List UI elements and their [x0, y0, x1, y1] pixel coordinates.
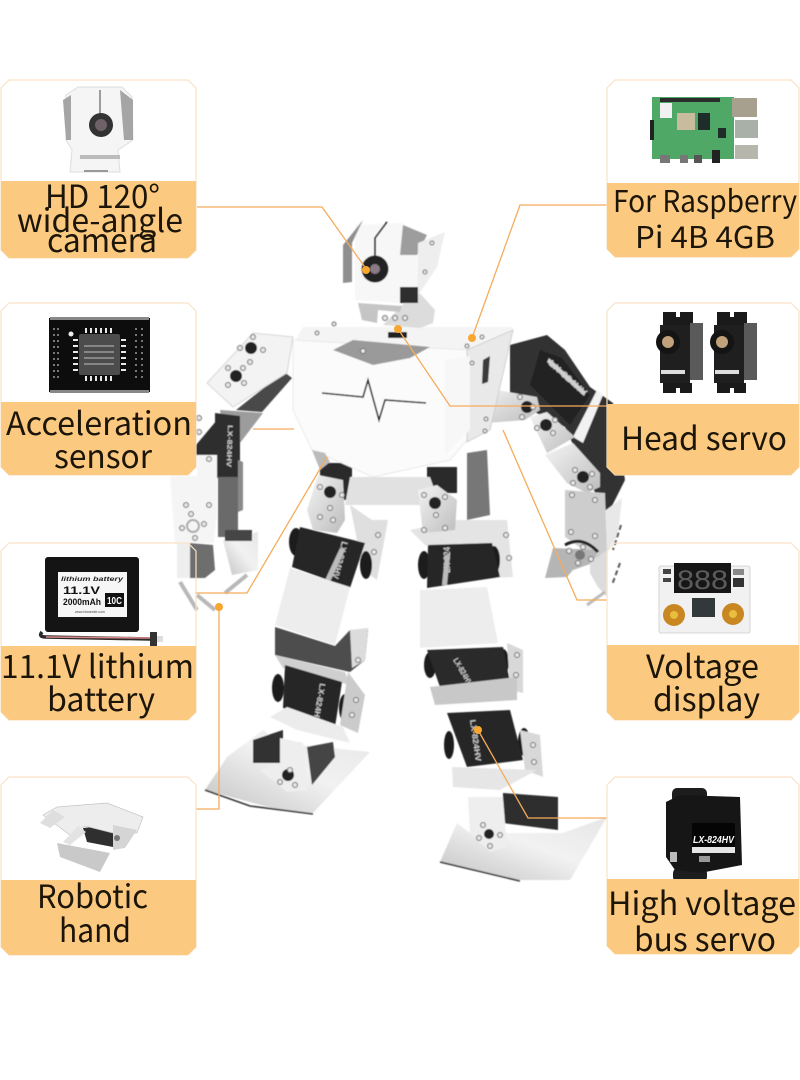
- robot left leg: LX-824HV: [311, 683, 327, 724]
- panel: robotic hand: [1, 777, 196, 955]
- panel: lithium battery: 11.1V lithium: [1, 642, 194, 688]
- icon: LX-824HV servo: [666, 788, 742, 882]
- panel: voltage display: display: [653, 675, 760, 721]
- panel: HD camera: HD 120°: [45, 172, 160, 218]
- leader lines: [195, 205, 607, 818]
- panel: HD camera: [1, 80, 196, 262]
- panel: HD camera: camera: [47, 216, 157, 262]
- panel: head servo: Head servo: [621, 414, 787, 460]
- icon: voltage display module: 888: [677, 565, 728, 595]
- panel: voltage display: Voltage: [646, 642, 759, 688]
- robot left arm: [170, 333, 293, 610]
- panel: Raspberry Pi: Pi 4B 4GB: [635, 213, 775, 257]
- panel: robotic hand: hand: [59, 906, 131, 952]
- icon: battery pack: www.hiwonder.com: [75, 610, 105, 614]
- panel: lithium battery: [1, 543, 196, 721]
- robot left leg: [205, 463, 388, 814]
- panel: acceleration sensor: [1, 303, 196, 478]
- robot head: [343, 220, 445, 338]
- icon: voltage display module: [659, 563, 750, 633]
- robot illustration: [170, 220, 625, 881]
- icon: battery pack: [41, 557, 163, 648]
- icon: sensor chip: [49, 317, 150, 393]
- icon: camera module: [63, 87, 133, 172]
- robot right leg: LX-824HV: [468, 719, 483, 763]
- robot left leg: LX-824HV: [330, 540, 350, 580]
- icon: head camera lens: [362, 256, 388, 282]
- panel: bus servo: [607, 777, 799, 961]
- panel: Raspberry Pi: [607, 80, 799, 257]
- robot right leg: LX-824HV: [451, 656, 474, 687]
- panel: HD camera: wide-angle: [17, 196, 183, 242]
- panel: head servo: [607, 303, 799, 475]
- icon: battery pack: 2000mAh: [63, 597, 101, 607]
- robot torso: [293, 322, 513, 477]
- robot right arm: [480, 335, 625, 605]
- icon: LX-824HV servo: LX-824HV: [693, 835, 735, 846]
- icon: robotic hand: [40, 803, 143, 872]
- robot left arm: LX-824HV: [225, 425, 233, 468]
- icon: chest heartbeat line: [322, 380, 426, 420]
- robot right leg: [345, 450, 607, 881]
- robot right leg: LX-824: [442, 547, 452, 573]
- panel: voltage display: [607, 543, 799, 721]
- icon: pair of servos: [656, 312, 757, 393]
- icon: battery pack: lithium battery: [61, 576, 124, 583]
- panel: robotic hand: Robotic: [37, 872, 148, 918]
- panel: lithium battery: battery: [47, 675, 155, 721]
- icon: battery pack: 10C: [107, 596, 122, 607]
- panel: bus servo: High voltage: [608, 879, 796, 925]
- panel: bus servo: bus servo: [634, 915, 776, 961]
- robot right arm: LX-824HV: [547, 358, 589, 398]
- panel: acceleration sensor: sensor: [54, 432, 153, 478]
- icon: Raspberry Pi board: [650, 97, 758, 163]
- panel: acceleration sensor: Acceleration: [6, 399, 192, 445]
- icon: battery pack: 11.1V: [63, 585, 101, 597]
